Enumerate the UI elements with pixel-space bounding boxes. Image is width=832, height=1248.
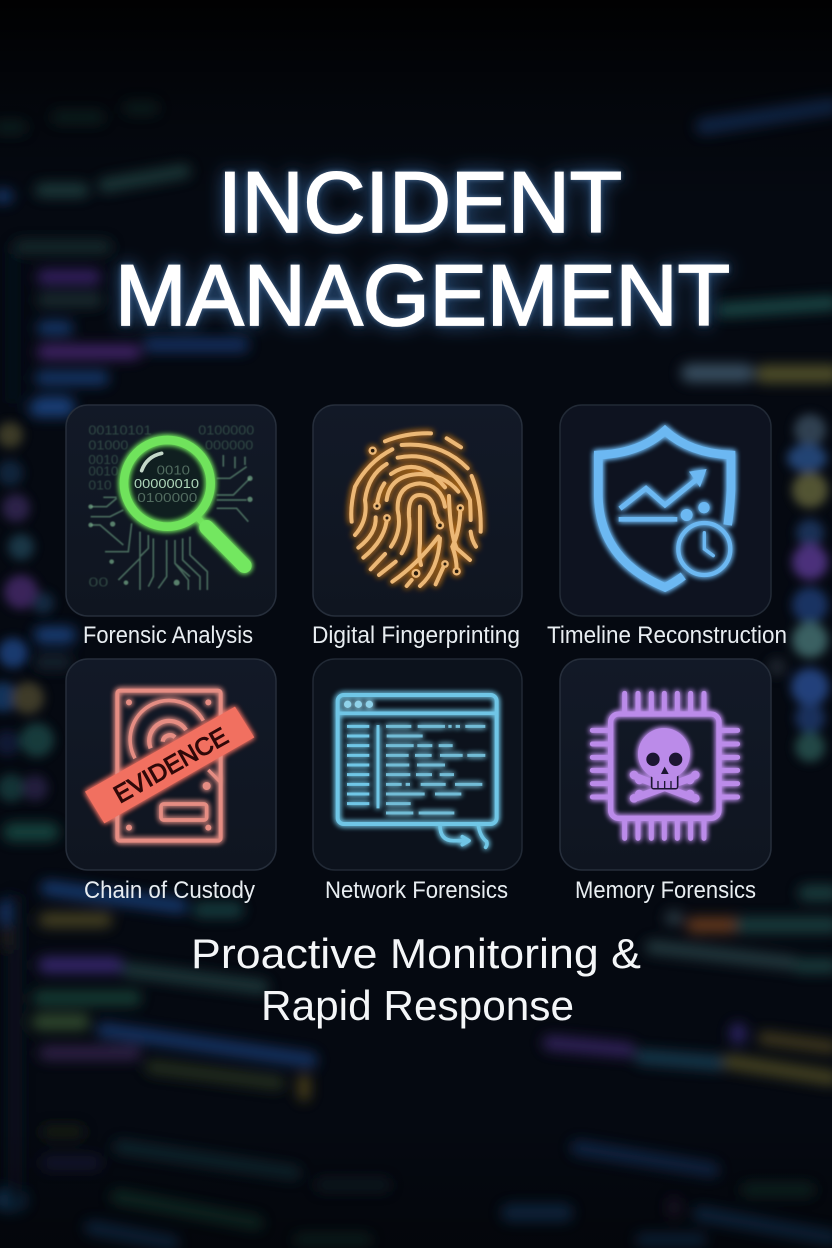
evidence tape text: EVIDENCE: [109, 723, 233, 809]
subtitle: Rapid Response: [261, 982, 574, 1029]
circuit and binary pattern: 00: [88, 575, 108, 590]
title: MANAGEMENT: [115, 248, 730, 344]
label: Chain of Custody: [84, 877, 255, 904]
circuit and binary pattern: [88, 423, 254, 590]
panel: Network Forensics: [313, 659, 522, 904]
icon: magnifying glass: 00000010: [134, 476, 199, 491]
label: Timeline Reconstruction: [547, 622, 787, 649]
card: [560, 659, 771, 870]
card: [560, 405, 771, 616]
subtitle: [191, 930, 641, 1029]
icon: magnifying glass: 0010: [157, 463, 190, 478]
card: [313, 659, 522, 870]
label: Network Forensics: [325, 877, 508, 904]
icon: magnifying glass: 0100000: [137, 490, 197, 505]
label: Memory Forensics: [575, 877, 756, 904]
icon: chip with skull: [592, 693, 738, 838]
circuit and binary pattern: 00110101: [88, 423, 152, 438]
circuit and binary pattern: 010: [88, 477, 112, 492]
card: [66, 659, 276, 870]
label: Digital Fingerprinting: [312, 622, 520, 649]
circuit and binary pattern: 000000: [205, 437, 253, 452]
title: INCIDENT: [218, 155, 622, 251]
icon: code window: [338, 695, 497, 847]
icon: fingerprint: [351, 433, 481, 586]
circuit and binary pattern: 01000: [88, 437, 128, 452]
icon: hard drive with evidence tape: [85, 691, 254, 841]
circuit and binary pattern: 0100000: [198, 423, 254, 438]
panel: Chain of Custody: [66, 659, 276, 904]
label: Forensic Analysis: [83, 622, 253, 649]
panel: Memory Forensics: [560, 659, 771, 904]
subtitle: Proactive Monitoring &: [191, 930, 641, 977]
circuit and binary pattern: 0010: [88, 452, 118, 467]
panel: Digital Fingerprinting: [312, 405, 522, 649]
icon: shield with chart and clock: [598, 431, 731, 587]
panel: Timeline Reconstruction: [547, 405, 787, 649]
panel: Forensic Analysis: [66, 405, 276, 649]
circuit and binary pattern: 0010: [88, 463, 118, 478]
icon: magnifying glass: [124, 440, 244, 566]
card: [313, 405, 522, 616]
card: [66, 405, 276, 616]
title: [115, 155, 730, 344]
